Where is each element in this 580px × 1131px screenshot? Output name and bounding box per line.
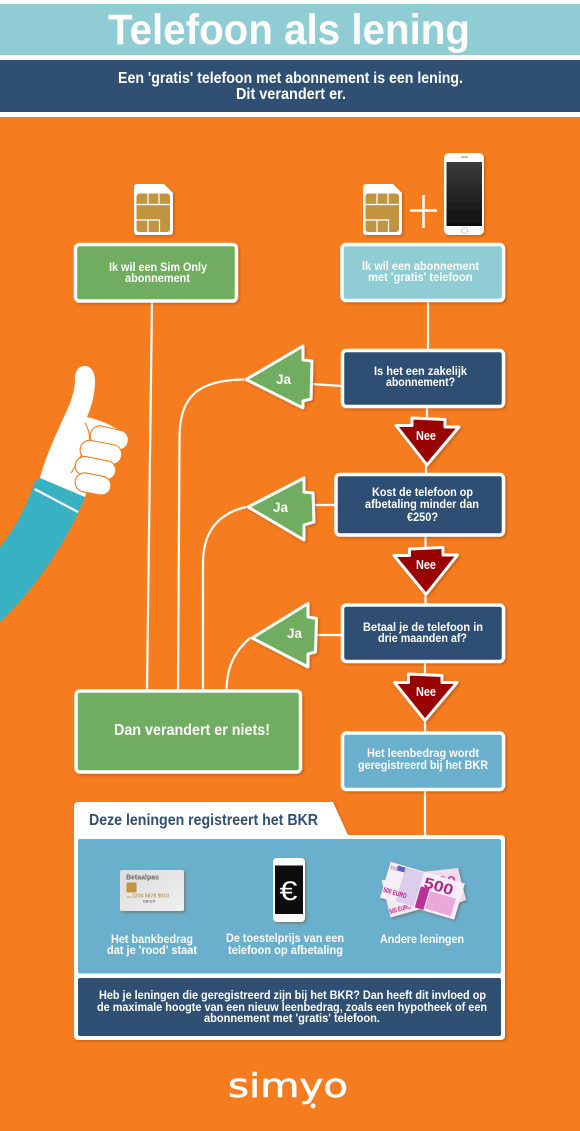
arrow: ja 2: [248, 478, 314, 540]
label ja: Ja: [276, 371, 291, 387]
label nee: Nee: [416, 684, 436, 699]
box text: [363, 620, 483, 645]
icon: plus sign: [410, 195, 437, 228]
subtitle text: Dit verandert er.: [236, 86, 346, 103]
flow connector lines: [147, 300, 428, 836]
box: sim only: [76, 244, 236, 301]
box text: Is het een zakelijk: [374, 364, 467, 378]
icon: phone with euro: €: [280, 876, 298, 906]
back left note: 500 EURO: [389, 903, 412, 916]
box text: [109, 260, 207, 285]
caption: bankbedrag: Het bankbedrag: [111, 932, 193, 946]
icon: bank card: 08/15: [143, 900, 155, 904]
front note: 500 EURO: [382, 887, 408, 901]
box: drie maanden: [342, 605, 504, 662]
box text: Het leenbedrag wordt: [367, 746, 479, 760]
title banner: [0, 4, 580, 55]
panel: BKR leningen: [74, 802, 505, 1040]
caption: toestelprijs: telefoon op afbetaling: [228, 943, 343, 957]
box text: Kost de telefoon op: [372, 485, 473, 499]
box text: [374, 364, 467, 389]
box text: [365, 485, 479, 524]
subtitle text: Een 'gratis' telefoon met abonnement is een lening.: [118, 70, 463, 87]
icon: phone with euro: [273, 858, 305, 922]
panel heading: Deze leningen registreert het BKR: [89, 812, 318, 829]
panel background and tab: [74, 802, 505, 1040]
box text: Ik wil een Sim Only: [109, 260, 207, 274]
box: zakelijk abonnement: [342, 350, 504, 406]
box: abonnement met telefoon: [342, 244, 504, 300]
box text: €250?: [407, 510, 438, 524]
title: Telefoon als lening: [108, 6, 470, 54]
box text: Dan verandert er niets!: [114, 722, 270, 739]
box text: afbetaling minder dan: [365, 497, 479, 511]
navy section with explanation: Heb je leningen die geregistreerd zijn bij het BKR? Dan heeft dit invloed op: [99, 988, 486, 1002]
icon: euro banknotes: [380, 862, 466, 920]
label nee: Nee: [416, 557, 436, 572]
arrow: nee 2: [394, 548, 458, 594]
arrow: ja 1: [246, 346, 312, 408]
arrow: nee 1: [396, 418, 459, 465]
caption: toestelprijs: De toestelprijs van een: [226, 931, 344, 945]
box text: Betaal je de telefoon in: [363, 620, 483, 634]
box text: [358, 746, 488, 772]
box text: [362, 259, 479, 284]
caption: bankbedrag: [107, 932, 197, 957]
label nee: Nee: [416, 428, 436, 443]
navy section with explanation: de maximale hoogte van een nieuw leenbedrag, zoals een hypotheek of een: [97, 1000, 487, 1014]
logo: simyo: simyo: [228, 1066, 348, 1105]
caption: toestelprijs: [226, 931, 344, 957]
caption: bankbedrag: dat je 'rood' staat: [107, 943, 197, 957]
icon: thumbs up hand: [0, 366, 130, 622]
subtitle banner: [0, 60, 580, 112]
box: BKR registratie: [342, 733, 504, 790]
subtitle text: [118, 70, 463, 103]
label ja: Ja: [273, 499, 288, 515]
box text: geregistreerd bij het BKR: [358, 758, 488, 772]
box: dan verandert er niets: [76, 691, 300, 772]
box: minder dan 250: [336, 474, 504, 535]
icon: smartphone: [444, 153, 484, 235]
box text: Ik wil een abonnement: [362, 259, 479, 273]
back right note: 500: [428, 873, 456, 890]
front note: [380, 862, 465, 920]
icon: sim card right: [363, 184, 402, 235]
icon: bank card: Betaalpas: [126, 872, 159, 882]
front note: 500: [422, 874, 455, 899]
navy section with explanation: abonnement met 'gratis' telefoon.: [204, 1011, 380, 1025]
arrow: nee 3: [394, 674, 457, 720]
arrow: ja 3: [252, 604, 316, 667]
navy section with explanation: [78, 978, 501, 1036]
box text: abonnement?: [386, 375, 455, 389]
icon: bank card: 1234 5678 9010: [132, 894, 169, 900]
icon: bank card: [120, 870, 184, 911]
box text: abonnement: [125, 271, 190, 285]
label ja: Ja: [287, 625, 302, 641]
box text: met 'gratis' telefoon: [368, 270, 472, 284]
icon: sim card left: [134, 184, 173, 235]
caption: andere leningen: Andere leningen: [380, 932, 464, 946]
front note: 500: [389, 865, 399, 873]
blue section: [78, 839, 501, 974]
box text: drie maanden af?: [378, 631, 467, 645]
